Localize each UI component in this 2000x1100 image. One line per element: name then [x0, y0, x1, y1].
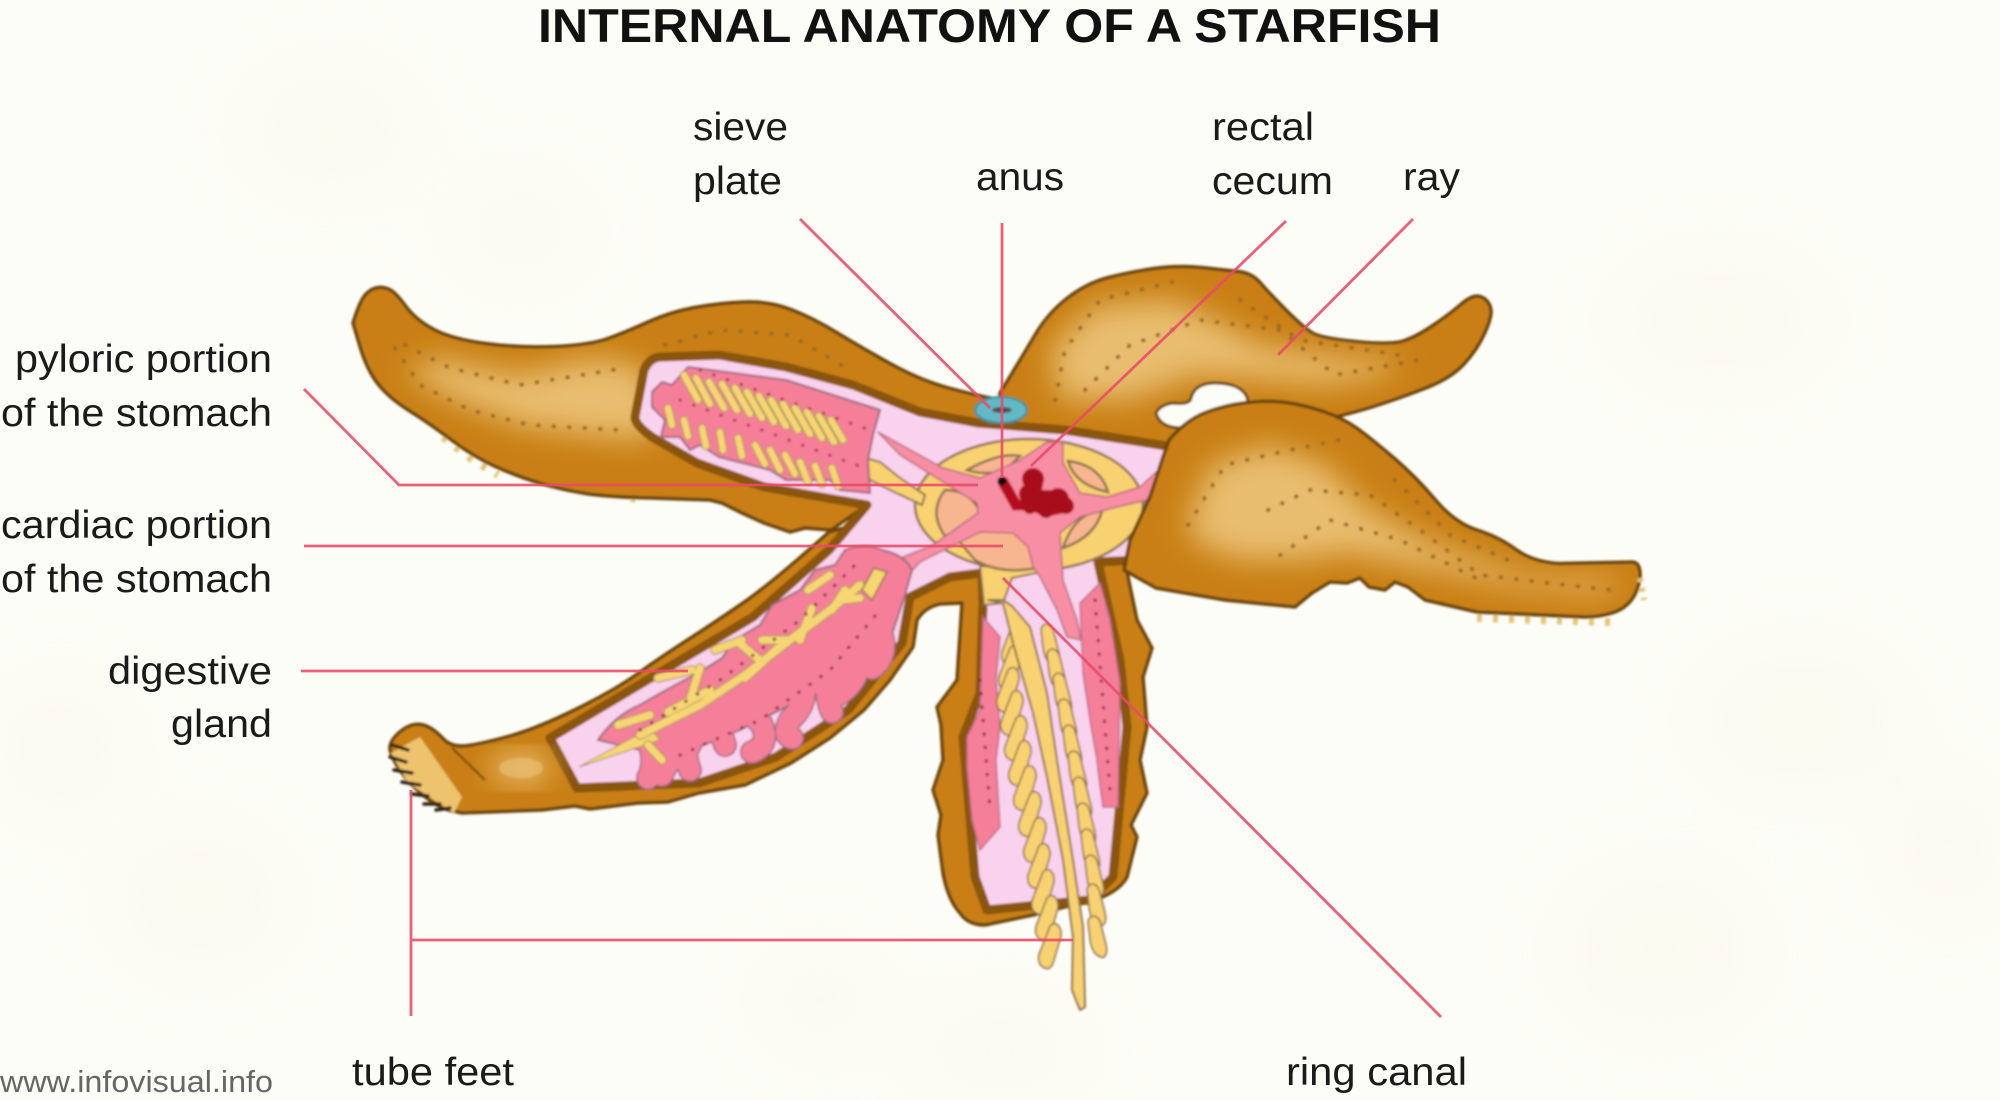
tube feet teeth under rays — [443, 437, 1610, 622]
label: rectal cecum: rectal — [1212, 106, 1314, 149]
label: digestive gland: digestive — [108, 650, 272, 693]
leader: rectal cecum — [1031, 221, 1286, 466]
label: anus: anus — [976, 156, 1064, 199]
lower-left and bottom ray walls — [390, 500, 1152, 925]
label: cardiac portion of the stomach: cardiac portion — [1, 504, 272, 547]
digestive gland: lower-left ray — [579, 546, 912, 778]
starfish illustration — [353, 266, 1644, 1010]
leader: anus — [1001, 223, 1003, 478]
label: digestive gland: gland — [171, 703, 272, 746]
ray: right upper — [1000, 266, 1491, 445]
label: pyloric portion of the stomach: of the stomach — [1, 392, 272, 435]
leader: digestive gland — [301, 670, 688, 672]
gap between rays — [1156, 383, 1250, 428]
bottom ray: tube feet rows — [997, 621, 1107, 969]
bottom ray: pink glands — [967, 583, 1120, 850]
label: pyloric portion of the stomach — [1, 338, 272, 435]
leader: sieve plate — [800, 219, 990, 408]
ray: left upper — [353, 287, 1000, 532]
ring canal and radial yellow ring — [862, 439, 1143, 605]
label: sieve plate: plate — [693, 160, 782, 203]
label: digestive gland — [108, 650, 272, 746]
title: INTERNAL ANATOMY OF A STARFISH — [538, 0, 1441, 52]
rectal cecum: dark red — [998, 468, 1074, 518]
leader: cardiac portion — [304, 545, 1003, 547]
stomach: pink star — [878, 432, 1167, 640]
label: rectal cecum — [1212, 106, 1333, 203]
body cavity: pale pink — [550, 355, 1173, 910]
watermark: www.infovisual.info — [0, 1064, 273, 1099]
label: pyloric portion of the stomach: pyloric portion — [15, 338, 272, 381]
sieve plate: madreporite — [975, 397, 1027, 423]
pyloric caeca: pink gland, left ray — [652, 367, 880, 493]
label: cardiac portion of the stomach: of the stomach — [1, 558, 272, 601]
label: sieve plate: sieve — [693, 106, 788, 149]
label: cardiac portion of the stomach — [1, 504, 272, 601]
lower-left ray tip with tube feet — [390, 737, 551, 813]
leader: ring canal — [1003, 578, 1441, 1017]
leader: tube feet — [411, 790, 1073, 1016]
leader lines — [301, 219, 1441, 1017]
label: ring canal: ring canal — [1286, 1051, 1467, 1094]
leader: pyloric portion — [304, 389, 978, 485]
label: ray: ray — [1403, 156, 1461, 199]
label: tube feet: tube feet — [352, 1051, 514, 1094]
ray: right lower — [1124, 401, 1644, 617]
gonad lobes: peach — [936, 455, 1108, 570]
bottom ray: radial canal spine — [988, 600, 1085, 1010]
label: rectal cecum: cecum — [1212, 160, 1333, 203]
label: sieve plate — [693, 106, 788, 203]
leader: ray — [1278, 219, 1413, 355]
